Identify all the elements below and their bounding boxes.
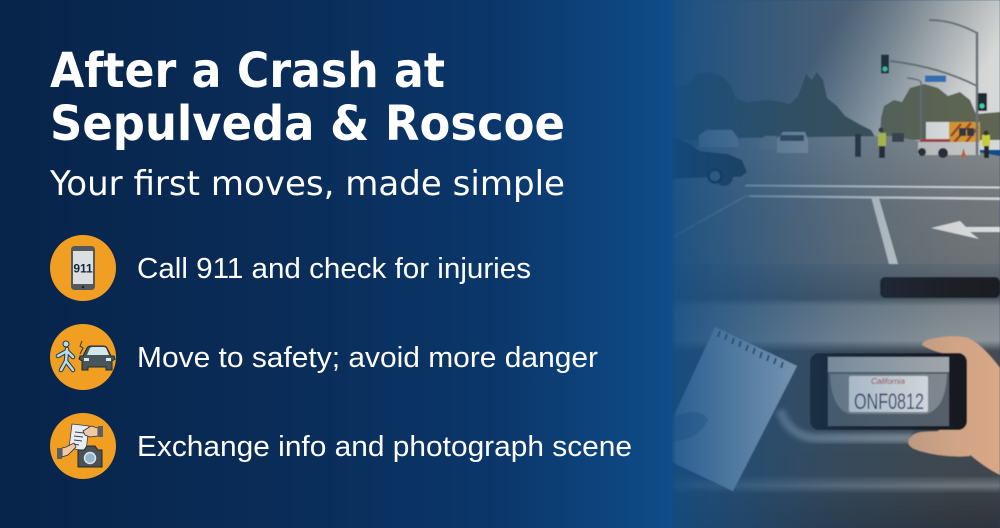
parked cars, distant (699, 130, 904, 153)
responders in hi-vis vests (855, 128, 990, 158)
step 1 text: Call 911 and check for injuries (137, 253, 531, 285)
stop lines and lane markings (672, 184, 1000, 264)
hand behind phone (908, 336, 1000, 475)
step 2 text: Move to safety; avoid more danger (137, 342, 598, 374)
turn arrow on road (931, 221, 1000, 239)
sky (672, 0, 1000, 150)
spoiler (880, 277, 1000, 298)
title: After a Crash at (50, 43, 445, 99)
photo: license plate and notepad (672, 264, 1000, 528)
step 1 (50, 235, 531, 301)
distant trees, left (672, 72, 877, 140)
thumb over phone (910, 431, 970, 456)
step 2 (50, 324, 598, 390)
traffic signal and streetlight poles (890, 20, 977, 155)
photo: crash scene at intersection (672, 0, 1000, 528)
icon: phone dialing 911 (50, 235, 116, 301)
phone showing license plate (810, 353, 967, 430)
fade overlay blending photos into panel (670, 0, 1000, 528)
ambulance (918, 122, 980, 158)
traffic signal, right pole (978, 93, 987, 111)
notepad (672, 327, 797, 491)
traffic signal, left arm (881, 54, 889, 74)
subtitle: Your first moves, made simple (49, 164, 565, 204)
icon: exchanging documents and camera (50, 413, 116, 479)
step 3 (50, 413, 632, 479)
phone showing license plate: California (871, 377, 905, 386)
icon: phone dialing 911: 911 (73, 262, 93, 276)
step 3 text: Exchange info and photograph scene (137, 431, 632, 463)
street sign (925, 76, 946, 82)
road (672, 136, 1000, 264)
title (50, 43, 565, 152)
phone showing license plate: ONF0812 (854, 389, 924, 414)
title: Sepulveda & Roscoe (50, 96, 565, 152)
damaged dark car (672, 137, 747, 186)
trunk recess (780, 410, 914, 438)
icon: person walking away from crashed car (50, 324, 116, 390)
distant trees, right (880, 84, 1000, 140)
